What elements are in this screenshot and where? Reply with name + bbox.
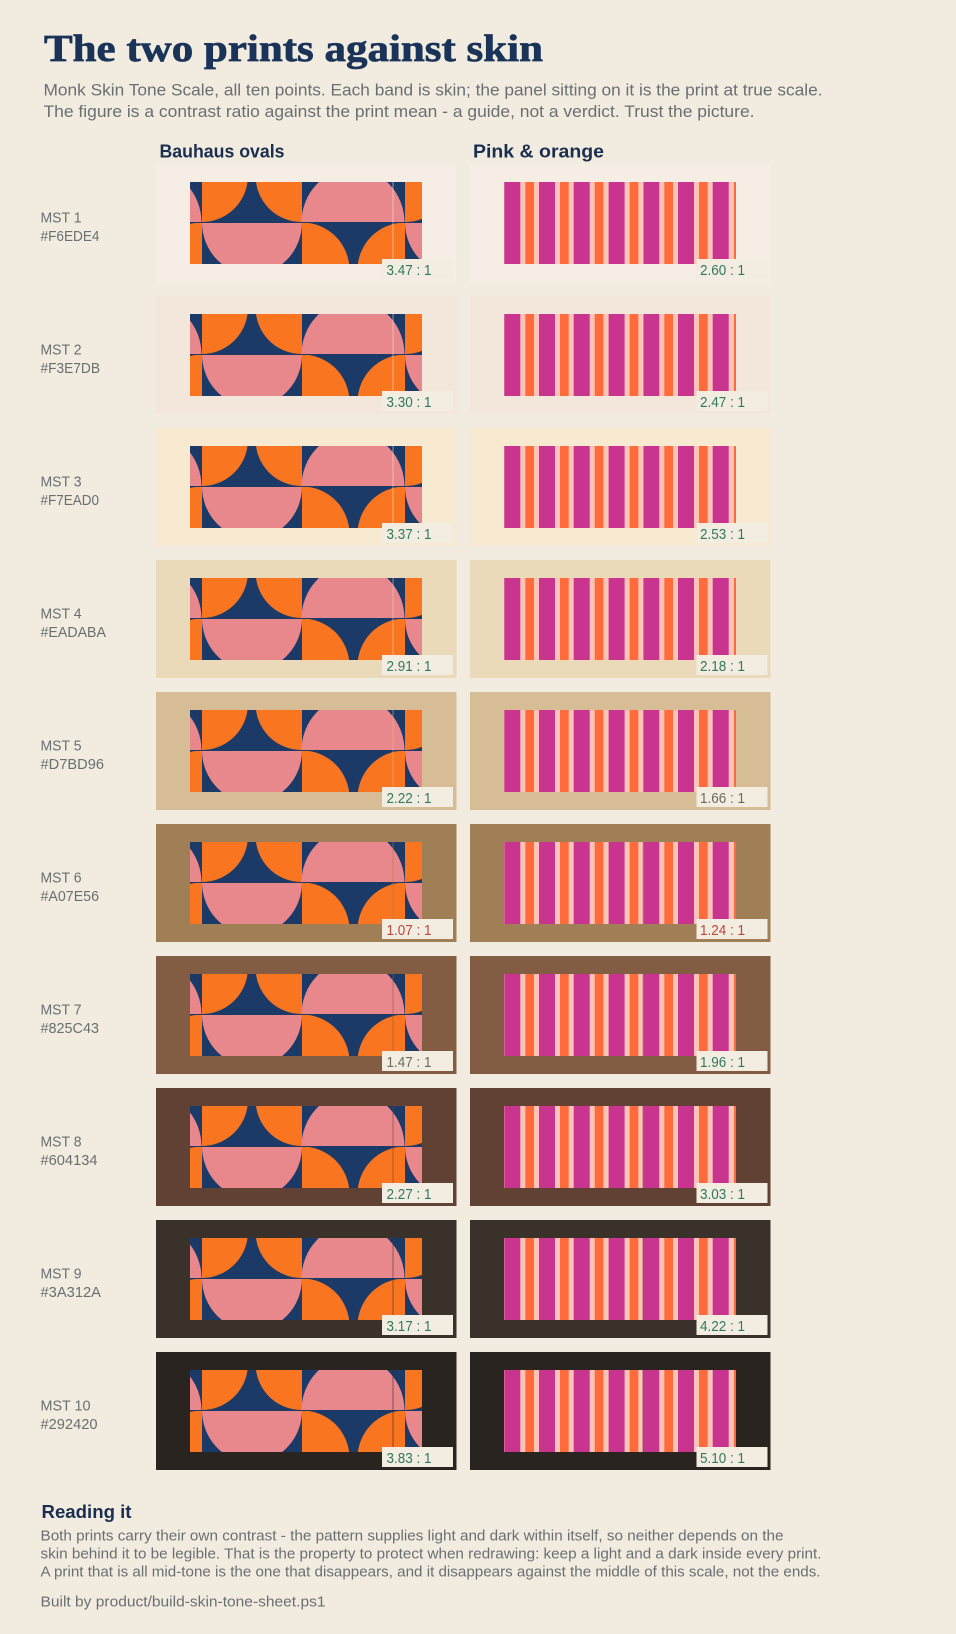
row label: #825C43 [40, 1021, 99, 1037]
row: MST 4 [40, 560, 770, 678]
panel: Bauhaus ovals on skin [98, 164, 507, 282]
panel: Bauhaus ovals on skin: 3.37 : 1 [386, 527, 432, 543]
panel: Pink and orange on skin: 2.60 : 1 [700, 263, 745, 279]
panel: Bauhaus ovals on skin: 3.47 : 1 [386, 263, 432, 279]
panel: Pink and orange on skin [470, 296, 770, 414]
row label: #F6EDE4 [40, 229, 100, 245]
panel: Pink and orange on skin [470, 1088, 770, 1206]
row: MST 7 [40, 956, 770, 1074]
panel: Bauhaus ovals on skin: 2.22 : 1 [386, 791, 432, 807]
panel: Pink and orange on skin [470, 824, 770, 942]
panel: Pink and orange on skin: 4.22 : 1 [700, 1319, 745, 1335]
panel: Bauhaus ovals on skin [98, 692, 507, 810]
row label: MST 5 [40, 738, 82, 754]
panel: Bauhaus ovals on skin [98, 1352, 507, 1470]
row label [40, 342, 100, 377]
row label: MST 9 [40, 1266, 82, 1282]
row label: MST 3 [40, 474, 82, 490]
panel: Bauhaus ovals on skin [98, 428, 507, 546]
panel: Bauhaus ovals on skin [98, 296, 507, 414]
panel: Bauhaus ovals on skin: 1.07 : 1 [386, 923, 432, 939]
build credit: Built by product/build-skin-tone-sheet.ps1 [40, 1594, 326, 1610]
row label [40, 210, 100, 245]
column heading: Pink & orange: Pink & orange [473, 142, 604, 162]
row label: #604134 [40, 1153, 98, 1169]
panel: Pink and orange on skin [470, 692, 770, 810]
subtitle [44, 82, 822, 121]
panel: Pink and orange on skin [470, 164, 770, 282]
panel: Pink and orange on skin [470, 1220, 770, 1338]
row label [40, 1266, 101, 1301]
row: MST 8 [40, 1088, 770, 1206]
row label: #F3E7DB [40, 361, 100, 377]
row: MST 2 [40, 296, 770, 414]
row label: MST 10 [40, 1398, 90, 1414]
row label [40, 738, 104, 773]
panel: Bauhaus ovals on skin [98, 956, 507, 1074]
explanatory paragraph: skin behind it to be legible. That is the property to protect when redrawing: keep a light and a dark inside every print. [40, 1546, 822, 1562]
row label: #EADABA [40, 625, 106, 641]
panel: Bauhaus ovals on skin: 3.30 : 1 [386, 395, 432, 411]
row: MST 3 [40, 428, 770, 546]
row: MST 5 [40, 692, 770, 810]
row label [40, 1134, 98, 1169]
row label: MST 4 [40, 606, 82, 622]
row label: MST 6 [40, 870, 82, 886]
row: MST 1 [40, 164, 770, 282]
panel: Bauhaus ovals on skin: 2.91 : 1 [386, 659, 432, 675]
row label [40, 870, 99, 905]
row label: #3A312A [40, 1285, 101, 1301]
subtitle: Monk Skin Tone Scale, all ten points. Each band is skin; the panel sitting on it is the print at true scale. [44, 82, 822, 100]
explanatory paragraph: A print that is all mid-tone is the one that disappears, and it disappears against the middle of this scale, not the ends. [40, 1564, 821, 1580]
row label: #F7EAD0 [40, 493, 99, 509]
row label [40, 1398, 98, 1433]
row label: MST 8 [40, 1134, 82, 1150]
panel: Pink and orange on skin: 2.18 : 1 [700, 659, 745, 675]
explanatory paragraph [40, 1528, 822, 1580]
row label: MST 1 [40, 210, 82, 226]
panel: Bauhaus ovals on skin [98, 560, 507, 678]
panel: Pink and orange on skin [470, 1352, 770, 1470]
panel: Pink and orange on skin: 2.47 : 1 [700, 395, 745, 411]
explanatory paragraph: Both prints carry their own contrast - the pattern supplies light and dark within itself, so neither depends on the [40, 1528, 784, 1544]
panel: Bauhaus ovals on skin [98, 1220, 507, 1338]
subtitle: The figure is a contrast ratio against the print mean - a guide, not a verdict. Trust the picture. [44, 103, 754, 121]
panel: Pink and orange on skin: 1.96 : 1 [700, 1055, 745, 1071]
row label: MST 7 [40, 1002, 82, 1018]
panel: Bauhaus ovals on skin: 3.83 : 1 [386, 1451, 432, 1467]
panel: Bauhaus ovals on skin: 3.17 : 1 [386, 1319, 432, 1335]
panel: Pink and orange on skin: 1.24 : 1 [700, 923, 745, 939]
panel: Pink and orange on skin: 5.10 : 1 [700, 1451, 745, 1467]
infographic sheet [40, 34, 821, 1610]
heading: Reading it: Reading it [42, 1502, 132, 1522]
panel: Bauhaus ovals on skin [98, 824, 507, 942]
title: The two prints against skin [44, 28, 543, 70]
column heading: Bauhaus ovals: Bauhaus ovals [160, 142, 284, 162]
panel: Pink and orange on skin [470, 428, 770, 546]
panel: Bauhaus ovals on skin: 1.47 : 1 [386, 1055, 432, 1071]
row label [40, 474, 99, 509]
row label: #D7BD96 [40, 757, 104, 773]
row label: #292420 [40, 1417, 98, 1433]
panel: Bauhaus ovals on skin [98, 1088, 507, 1206]
panel: Pink and orange on skin: 1.66 : 1 [700, 791, 745, 807]
row label: MST 2 [40, 342, 82, 358]
row: MST 6 [40, 824, 770, 942]
panel: Pink and orange on skin: 3.03 : 1 [700, 1187, 745, 1203]
row: MST 10 [40, 1352, 770, 1470]
row label: #A07E56 [40, 889, 99, 905]
panel: Pink and orange on skin [470, 560, 770, 678]
panel: Bauhaus ovals on skin: 2.27 : 1 [386, 1187, 432, 1203]
panel: Pink and orange on skin [470, 956, 770, 1074]
row: MST 9 [40, 1220, 770, 1338]
row label [40, 1002, 99, 1037]
panel: Pink and orange on skin: 2.53 : 1 [700, 527, 745, 543]
row label [40, 606, 106, 641]
